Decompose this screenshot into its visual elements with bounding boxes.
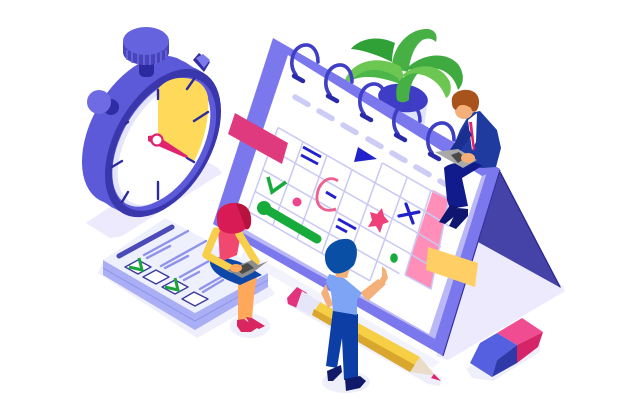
stopwatch outer ring xyxy=(81,49,245,237)
mark: check xyxy=(268,177,286,192)
pencil wood tip xyxy=(410,357,436,376)
pink column xyxy=(405,190,449,289)
stack side xyxy=(103,260,268,330)
left arm xyxy=(206,231,232,269)
calendar stand back xyxy=(470,172,561,288)
man arm xyxy=(450,125,472,154)
small button top xyxy=(196,54,210,68)
woman hand xyxy=(230,264,242,272)
green bar stem xyxy=(264,208,317,239)
woman laptop xyxy=(227,260,268,278)
check mark 1 xyxy=(129,258,142,270)
mark: triangle xyxy=(354,147,377,162)
pencil eraser xyxy=(287,287,307,308)
stopwatch face shadow xyxy=(92,63,230,223)
boy pants xyxy=(326,310,358,380)
top frame strip covering page xyxy=(285,45,500,176)
boy hair xyxy=(325,239,357,274)
checkbox 2 xyxy=(143,270,169,284)
eraser xyxy=(470,318,543,377)
stopwatch face xyxy=(98,67,230,221)
ring 2 xyxy=(326,65,352,101)
frame bottom edge xyxy=(443,170,500,356)
leaf: top xyxy=(392,29,437,72)
mark: pink dot xyxy=(292,198,302,206)
crown side xyxy=(123,41,169,65)
woman sitting with laptop xyxy=(206,203,268,332)
eraser top blue xyxy=(470,333,517,377)
right shoe xyxy=(449,208,468,229)
plant xyxy=(345,29,463,128)
sticky note: crimson xyxy=(228,113,288,164)
clock ticks xyxy=(112,79,208,202)
checklist paper stack xyxy=(98,218,275,338)
left shoe xyxy=(439,205,458,224)
stopwatch body xyxy=(58,36,240,234)
left shoe xyxy=(327,365,342,381)
ring 3 xyxy=(360,84,386,120)
pencil metal band xyxy=(296,291,320,315)
boy pointing arm xyxy=(360,279,386,301)
stack top sheet xyxy=(103,218,268,313)
pencil xyxy=(287,287,441,381)
calendar frame xyxy=(213,38,500,356)
boy shirt xyxy=(326,274,362,315)
shadow: eraser xyxy=(466,340,540,381)
shadow: stopwatch xyxy=(86,155,222,238)
boy pointing at calendar xyxy=(321,239,388,391)
woman skirt xyxy=(210,257,262,285)
stopwatch left button xyxy=(87,90,119,115)
laptop base xyxy=(435,149,477,168)
hair main xyxy=(217,203,251,234)
shadow: woman feet xyxy=(230,314,270,338)
ring 4 end xyxy=(396,135,405,140)
tie xyxy=(469,122,475,151)
shadow: under calendar front xyxy=(240,250,440,368)
page shadow band xyxy=(232,55,487,339)
woman legs xyxy=(238,277,257,320)
hair shade xyxy=(236,203,251,229)
ring 1 end xyxy=(294,76,303,81)
sticky note: yellow xyxy=(426,247,478,287)
stopwatch xyxy=(58,27,245,237)
shirt xyxy=(468,113,477,150)
ring 5 wire xyxy=(428,123,454,153)
boy neck xyxy=(335,268,350,278)
shadow: pencil xyxy=(285,292,442,386)
left shoe xyxy=(237,319,257,332)
ring 3 end xyxy=(362,115,371,120)
leaf: right front xyxy=(400,66,451,98)
stack page line xyxy=(103,268,268,321)
checkbox 1 xyxy=(125,260,151,274)
mark: dash xyxy=(326,192,336,198)
crown grooves xyxy=(127,50,166,65)
floor shadows xyxy=(86,155,565,393)
calendar xyxy=(213,38,561,356)
woman shoes xyxy=(237,317,265,332)
mark: pink circle xyxy=(317,179,338,210)
check mark 2 xyxy=(165,278,178,290)
man shoes xyxy=(439,205,468,229)
mark: green dot xyxy=(390,253,398,263)
stopwatch crown xyxy=(123,27,169,65)
checkbox 4 xyxy=(182,292,208,306)
leaf: left inner shade xyxy=(352,70,400,84)
laptop base xyxy=(227,260,268,278)
stack shadow xyxy=(98,262,275,338)
leaf: back dark xyxy=(351,39,395,62)
boy hand xyxy=(377,266,388,288)
eraser top pink xyxy=(497,318,543,345)
man head xyxy=(452,90,479,119)
pencil body xyxy=(312,302,420,372)
mark: green bar xyxy=(257,201,317,239)
boy shoes xyxy=(327,365,366,391)
ring 5 xyxy=(428,123,454,159)
leaf: right xyxy=(405,55,463,90)
man hand xyxy=(461,153,475,163)
checkbox 3 xyxy=(162,280,188,294)
mark: second double line xyxy=(336,219,356,232)
leaf: center stem xyxy=(396,73,418,102)
stopwatch inner ring xyxy=(90,59,238,229)
button stem xyxy=(103,99,119,115)
eraser side pink xyxy=(517,332,543,363)
mark: cross xyxy=(399,204,419,223)
hand pointer xyxy=(148,135,188,158)
ring 1 wire xyxy=(292,45,318,75)
pencil lead xyxy=(431,374,441,381)
spiral rings xyxy=(292,45,454,159)
woman arms xyxy=(206,231,256,269)
mark: double line xyxy=(301,147,321,164)
laptop keys xyxy=(235,263,254,274)
eraser side blue xyxy=(492,345,517,377)
man sitting with laptop xyxy=(435,90,501,229)
ring 5 end xyxy=(430,154,439,159)
ring 4 wire xyxy=(394,104,420,134)
calendar page xyxy=(232,55,482,334)
stopwatch small button xyxy=(193,53,210,72)
clock hand xyxy=(148,134,188,158)
plant pot rim xyxy=(376,81,430,115)
hair xyxy=(452,90,479,112)
face xyxy=(455,103,473,119)
pencil shaded side xyxy=(312,309,415,372)
small button base xyxy=(193,53,210,72)
stopwatch neck xyxy=(139,60,154,77)
button cap xyxy=(87,90,111,114)
ring 4 xyxy=(394,104,420,140)
leaf: left large xyxy=(345,60,403,84)
crown top xyxy=(123,27,169,55)
ring 2 end xyxy=(328,96,337,101)
mark: star xyxy=(368,208,389,233)
shadow: boy feet xyxy=(322,371,370,393)
man pants xyxy=(444,162,482,209)
man jacket xyxy=(452,111,501,168)
right arm xyxy=(239,234,256,262)
man shirt and tie xyxy=(468,113,477,151)
ring 2 wire xyxy=(326,65,352,95)
page dashes xyxy=(295,97,446,184)
ring 1 xyxy=(292,45,318,81)
checklist header bar xyxy=(119,227,172,256)
checklist text lines xyxy=(144,231,223,292)
right shoe xyxy=(345,376,366,391)
laptop keys xyxy=(451,152,465,163)
right shoe xyxy=(246,317,265,329)
woman hair xyxy=(217,203,251,234)
plant pot body xyxy=(380,85,428,128)
boy rear arm xyxy=(321,284,333,308)
ring 3 wire xyxy=(360,84,386,114)
man laptop xyxy=(435,149,477,168)
stand edge xyxy=(500,172,560,287)
yellow elapsed sector xyxy=(158,78,208,161)
calendar grid xyxy=(248,128,449,289)
shadow: calendar xyxy=(436,240,565,360)
green bar head xyxy=(257,201,271,215)
hand hub xyxy=(152,134,162,146)
woman top xyxy=(218,228,242,262)
